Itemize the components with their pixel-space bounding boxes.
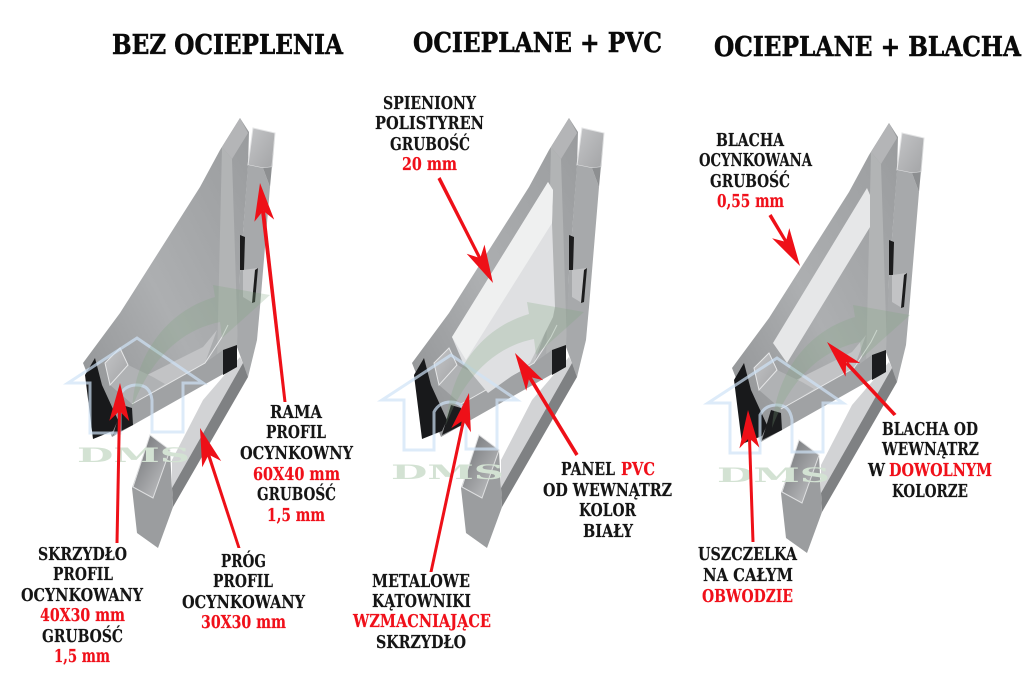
title: ocieplane + pvc: OCIEPLANE + PVC — [413, 27, 662, 59]
label: threshold — [182, 551, 305, 633]
label: angle brackets: WZMACNIAJĄCE — [352, 612, 491, 632]
label: pvc panel: KOLOR — [579, 501, 636, 521]
label: galvanized sheet: BLACHA — [716, 131, 784, 151]
illustration: bare door section — [68, 118, 275, 548]
panel: door section without insulation — [21, 118, 353, 667]
label: galvanized sheet — [699, 131, 812, 212]
label: sash: OCYNKOWANY — [21, 586, 143, 606]
label: sash: GRUBOŚĆ — [42, 626, 123, 647]
panel: door section with sheet metal — [698, 123, 992, 607]
arrow: angle brackets — [430, 393, 471, 572]
label: frame — [240, 403, 353, 526]
label: frame: RAMA — [270, 403, 322, 423]
arrow: frame — [254, 183, 286, 402]
label: frame: 1,5 mm — [267, 506, 325, 526]
label: polystyrene: 20 mm — [402, 155, 457, 175]
arrow: galvanized sheet — [768, 214, 800, 266]
label: angle brackets: METALOWE — [372, 572, 470, 592]
label: frame: GRUBOŚĆ — [257, 484, 336, 505]
label: threshold: 30X30 mm — [201, 613, 286, 633]
label: inner sheet: DOWOLNYM — [889, 461, 992, 481]
label: inner sheet: KOLORZE — [892, 482, 968, 502]
label: pvc panel: PVC — [621, 460, 655, 480]
label: sash: 40X30 mm — [40, 606, 125, 626]
label: inner sheet: BLACHA OD — [882, 420, 978, 440]
label: angle brackets: SKRZYDŁO — [376, 633, 466, 653]
label: frame: 60X40 mm — [253, 465, 340, 485]
label: pvc panel — [543, 460, 672, 542]
label: threshold: PRÓG — [221, 551, 266, 572]
label: polystyrene — [375, 94, 484, 175]
label: gasket — [698, 545, 797, 607]
label: gasket: NA CAŁYM — [703, 566, 793, 586]
title: bez ocieplenia: BEZ OCIEPLENIA — [112, 29, 344, 61]
label: threshold: PROFIL — [213, 572, 273, 592]
label: threshold: OCYNKOWANY — [182, 593, 305, 613]
label: angle brackets: KĄTOWNIKI — [372, 592, 471, 612]
label: sash — [21, 545, 143, 667]
label: inner sheet — [867, 420, 992, 502]
label: gasket: OBWODZIE — [702, 587, 793, 607]
label: sash: SKRZYDŁO — [38, 545, 127, 565]
arrow: gasket — [739, 410, 759, 542]
illustration: door section with sheet metal — [708, 123, 924, 553]
label: inner sheet: WEWNĄTRZ — [881, 440, 979, 460]
label: galvanized sheet: OCYNKOWANA — [699, 151, 812, 171]
label: polystyrene: GRUBOŚĆ — [390, 134, 470, 155]
arrow: pvc panel — [515, 353, 578, 456]
arrow: sash — [109, 383, 129, 543]
label: pvc panel: PANEL — [561, 460, 615, 480]
label: frame: OCYNKOWNY — [240, 444, 353, 464]
arrow: polystyrene — [438, 177, 493, 283]
label: galvanized sheet: 0,55 mm — [717, 192, 784, 212]
label: galvanized sheet: GRUBOŚĆ — [710, 171, 790, 192]
label: frame: PROFIL — [266, 423, 326, 443]
label: polystyrene: POLISTYREN — [375, 114, 484, 134]
label: sash: 1,5 mm — [54, 647, 110, 667]
arrow: inner sheet — [827, 342, 896, 416]
label: inner sheet: W — [867, 461, 885, 481]
label: polystyrene: SPIENIONY — [383, 94, 476, 114]
illustration: door section with pvc panel — [382, 118, 604, 548]
label: gasket: USZCZELKA — [698, 545, 797, 565]
label: pvc panel: BIAŁY — [583, 522, 633, 542]
label: pvc panel: OD WEWNĄTRZ — [543, 481, 672, 501]
panel: door section with pvc — [352, 94, 672, 653]
label: sash: PROFIL — [53, 565, 113, 585]
arrow: threshold — [200, 428, 240, 548]
label: angle brackets — [352, 572, 491, 653]
